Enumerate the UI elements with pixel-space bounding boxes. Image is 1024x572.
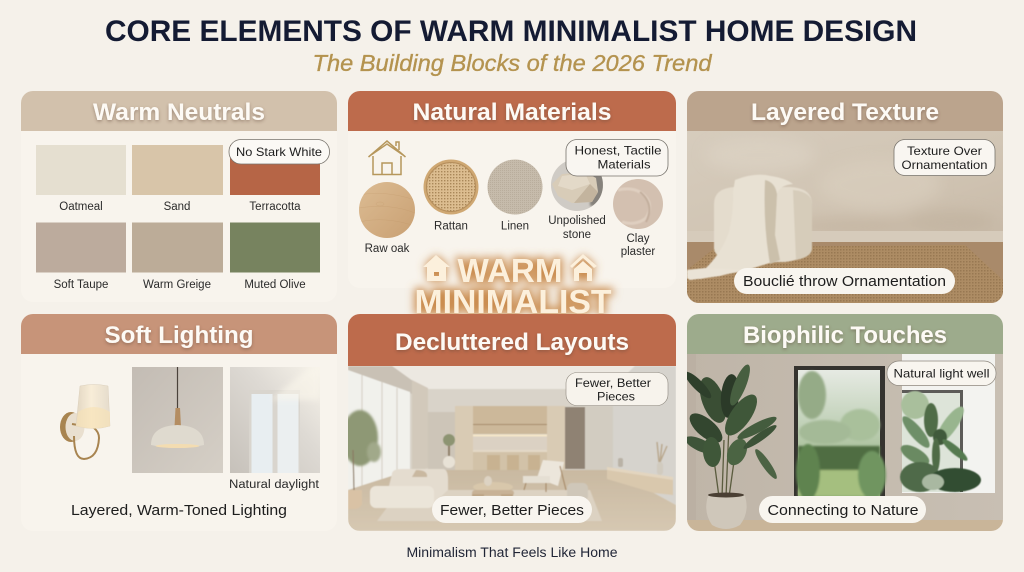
potted plant — [682, 362, 780, 529]
olive tree — [348, 408, 382, 504]
material: clay plaster: Clay — [626, 233, 650, 245]
callout: no stark white: No Stark White — [236, 145, 322, 159]
caption pill: boucle throw: Bouclié throw Ornamentation — [743, 273, 946, 290]
callout: texture over ornamentation: Texture Over — [907, 144, 982, 158]
panel header — [21, 91, 337, 131]
material: unpolished stone: Unpolished — [548, 215, 606, 227]
callout: fewer better pieces — [566, 372, 668, 406]
caption: natural daylight: Natural daylight — [229, 479, 320, 491]
boucle pouf — [714, 187, 812, 262]
subtitle: The Building Blocks of the 2026 Trend — [312, 50, 713, 76]
heading: layered texture: Layered Texture — [751, 99, 939, 126]
coffee table — [472, 476, 514, 496]
material: raw oak: Raw oak — [365, 243, 410, 255]
swatch: oatmeal: Oatmeal — [59, 201, 103, 213]
ottoman — [567, 483, 588, 498]
material: unpolished stone: stone — [563, 229, 591, 241]
panel body — [21, 91, 337, 302]
material: unpolished stone — [548, 159, 606, 241]
heading: Soft Lighting — [104, 322, 253, 349]
callout: honest tactile materials: Honest, Tactile — [574, 144, 662, 158]
icon: right house — [570, 254, 597, 281]
draped throw — [687, 175, 793, 280]
wall mottling — [813, 216, 970, 230]
material: rattan — [424, 160, 478, 232]
callout: natural light well — [887, 361, 996, 386]
callout: texture over ornamentation — [894, 140, 995, 176]
wood floor — [348, 470, 676, 531]
caption pill: connecting to nature — [759, 496, 926, 523]
callout: texture over ornamentation: Ornamentation — [902, 158, 988, 172]
icon: left house — [423, 255, 450, 281]
panel body — [21, 314, 337, 531]
light well — [898, 354, 995, 493]
caption: layered warm-toned lighting: Layered, Warm-Toned Lighting — [71, 502, 287, 519]
swatch: warm greige — [132, 222, 223, 291]
panel: warm neutrals — [21, 91, 337, 302]
caption pill: boucle throw — [734, 268, 955, 294]
ceiling — [392, 366, 635, 389]
room back wall — [410, 388, 612, 470]
footer tagline: Minimalism That Feels Like Home — [406, 545, 618, 560]
material: linen: Linen — [501, 220, 529, 232]
badge wordmark: WARM — [458, 252, 562, 289]
badge wordmark — [414, 252, 612, 320]
icon: wall sconce — [60, 384, 110, 459]
wood floor — [687, 242, 1003, 303]
caption pill: fewer better pieces: Fewer, Better Pieces — [440, 502, 584, 519]
material: raw oak — [359, 182, 415, 255]
icon: house outline — [368, 141, 406, 174]
area rug — [377, 490, 602, 521]
jute rug — [687, 245, 1003, 303]
callout: no stark white — [229, 140, 330, 164]
side nook with plant — [428, 412, 455, 470]
floor-to-ceiling windows — [348, 370, 428, 490]
heading: Natural Materials — [412, 99, 612, 126]
kitchen cabinetry — [455, 406, 565, 472]
swatch: warm greige: Warm Greige — [143, 279, 211, 291]
panel: natural materials — [348, 91, 676, 258]
swatch: sand: Sand — [164, 201, 190, 213]
plaster wall photo — [687, 131, 1003, 236]
image: window with daylight — [230, 367, 320, 473]
swatch: muted olive — [230, 222, 320, 291]
panel: layered texture — [687, 91, 1003, 303]
heading: decluttered layouts: Decluttered Layouts — [395, 329, 629, 356]
callout: honest tactile materials — [566, 140, 668, 176]
swatch: terracotta: Terracotta — [249, 201, 301, 213]
swatch: oatmeal — [36, 145, 126, 213]
hallway opening — [565, 407, 586, 469]
central badge: warm minimalist — [414, 252, 612, 320]
heading: biophilic touches: Biophilic Touches — [743, 322, 947, 349]
picture window — [794, 366, 886, 500]
badge glow — [414, 252, 612, 320]
badge glow: WARM — [458, 252, 562, 289]
sofa — [370, 469, 448, 508]
material: rattan: Rattan — [434, 220, 468, 232]
panel: soft lighting — [21, 314, 337, 531]
heading: Warm Neutrals — [93, 99, 265, 126]
callout: fewer better pieces: Pieces — [597, 390, 635, 404]
title: CORE ELEMENTS OF WARM MINIMALIST HOME DESIGN — [105, 15, 917, 48]
floor — [687, 520, 1003, 531]
image: pendant lamp — [132, 367, 223, 473]
material: clay plaster: plaster — [621, 246, 655, 258]
swatch: soft taupe — [36, 222, 126, 291]
caption pill: connecting to nature: Connecting to Nature — [768, 502, 918, 519]
material: clay plaster — [613, 179, 663, 258]
heading band — [687, 91, 1003, 131]
heading band — [348, 314, 676, 366]
wall — [687, 354, 1003, 520]
panel body — [348, 91, 676, 288]
right wall — [656, 476, 676, 505]
swatch: soft taupe: Soft Taupe — [54, 279, 108, 291]
panel: decluttered layouts — [342, 314, 676, 531]
panel header — [21, 314, 337, 354]
badge wordmark: MINIMALIST — [414, 283, 612, 320]
accent chair — [523, 460, 566, 492]
swatch: sand — [132, 145, 223, 213]
swatch: terracotta — [230, 145, 320, 213]
material: linen — [488, 160, 542, 232]
panel: biophilic touches — [682, 314, 1003, 531]
console with vases — [607, 442, 673, 495]
heading band — [687, 314, 1003, 354]
callout: honest tactile materials: Materials — [598, 158, 650, 172]
room scene — [342, 366, 676, 531]
caption pill: fewer better pieces — [432, 496, 592, 523]
callout: natural light well: Natural light well — [894, 366, 990, 380]
badge glow: MINIMALIST — [414, 283, 612, 320]
swatch: muted olive: Muted Olive — [244, 279, 306, 291]
panel header — [348, 91, 676, 131]
baseboard — [687, 231, 1003, 242]
callout: fewer better pieces: Fewer, Better — [575, 376, 651, 390]
